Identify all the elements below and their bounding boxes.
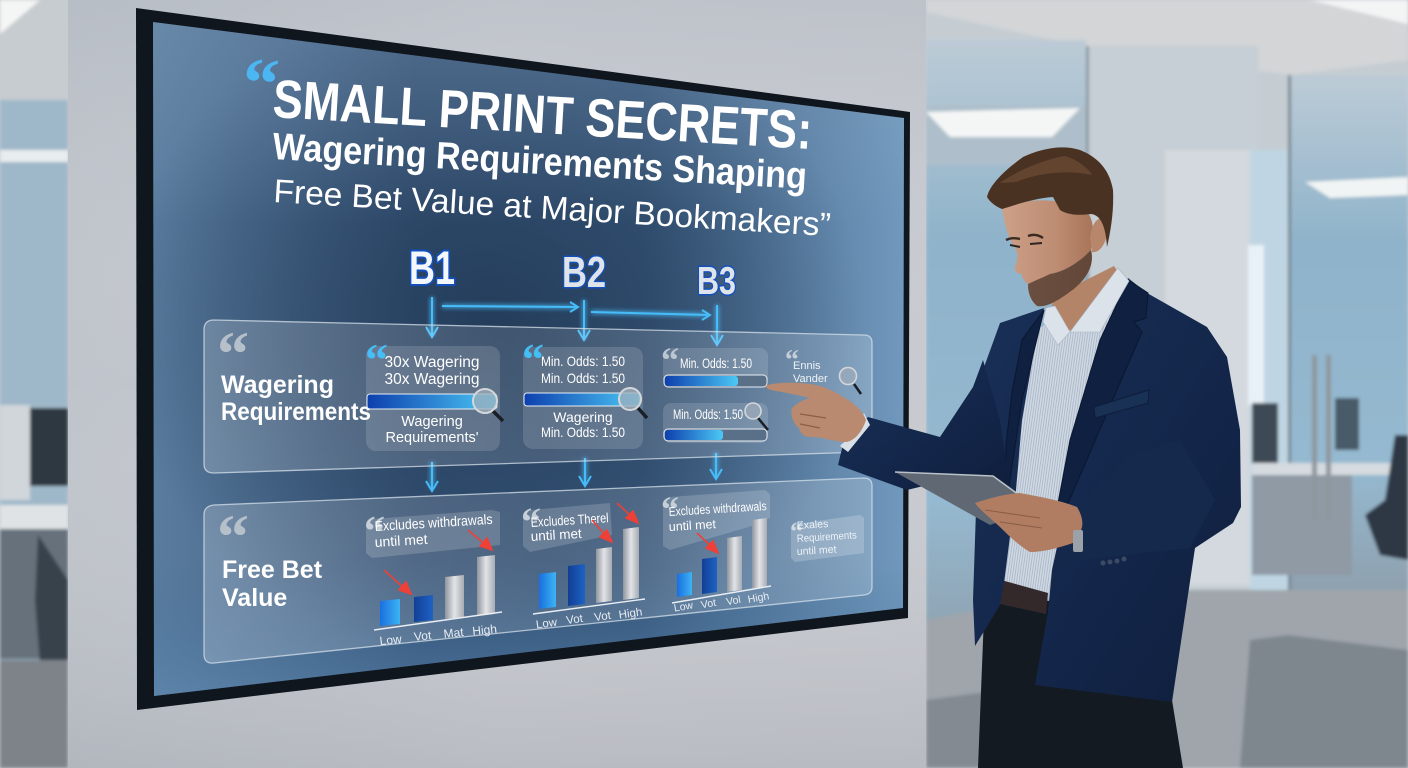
card: small requirements note: Exales [796, 518, 829, 532]
card: small requirements note: until met [796, 544, 837, 558]
card: B3 minimum odds upper [661, 340, 768, 387]
card: B2 minimum odds: Min. Odds: 1.50 [541, 353, 625, 369]
card: B2 minimum odds: “ [522, 335, 544, 384]
right sleeve cuff area [1077, 440, 1215, 560]
icon: magnifier [840, 368, 861, 394]
bar chart: Vol [725, 594, 742, 608]
card text: until met [668, 517, 717, 534]
jacket [973, 278, 1241, 702]
bar chart: Mat [443, 625, 465, 641]
bar chart: Vot [566, 613, 584, 627]
icon: magnifier [619, 388, 647, 418]
bar chart: High [747, 590, 770, 606]
title line 2: Wagering Requirements Shaping [271, 126, 808, 198]
red arrows [592, 503, 638, 542]
card text: Excludes Therel [530, 510, 609, 530]
card: small requirements note: Requirements [796, 529, 857, 545]
title line 3: Free Bet Value at Major Bookmakers” [273, 172, 832, 243]
shirt cuff [840, 413, 870, 452]
bar chart [374, 555, 502, 648]
card: B1 wagering: “ [365, 334, 388, 385]
bar chart: Vot [594, 610, 612, 624]
card: B1 wagering: Requirements' [385, 430, 479, 446]
tablet [895, 472, 1037, 525]
wristwatch [1073, 530, 1083, 552]
bar chart: Low [535, 617, 559, 631]
bar chart: Vot [413, 628, 433, 644]
icon: magnifier [473, 389, 503, 421]
card: B2 minimum odds: Wagering [553, 409, 613, 425]
panel quote mark: “ [217, 318, 249, 389]
shirt collar [1043, 268, 1129, 345]
chart group 3: “ [661, 489, 679, 529]
title [240, 42, 832, 243]
belt [1000, 580, 1048, 614]
panel heading: Free Bet [222, 556, 323, 584]
wall [68, 0, 926, 768]
hair [987, 147, 1113, 247]
card: B1 wagering [365, 334, 503, 451]
ear [1090, 218, 1107, 252]
card: small note: “ [785, 345, 799, 376]
panel: wagering requirements [204, 318, 872, 473]
head [987, 147, 1113, 306]
red arrow [697, 533, 718, 553]
card: B2 minimum odds: Min. Odds: 1.50 [541, 424, 625, 440]
bookmaker labels [409, 241, 736, 303]
card: small requirements note: “ [790, 517, 803, 546]
background: right office [926, 0, 1408, 768]
card: B1 wagering: 30x Wagering [384, 354, 480, 371]
beard [1028, 250, 1092, 306]
chart group 3 [661, 489, 771, 615]
card text: until met [374, 531, 428, 550]
card text [668, 499, 767, 534]
card text: Excludes withdrawals [374, 511, 493, 534]
wall-mounted screen [136, 8, 910, 710]
panel heading: Value [222, 584, 287, 612]
card: B1 wagering: 30x Wagering [384, 371, 480, 388]
neck [1050, 266, 1122, 332]
bar chart: High [472, 622, 498, 638]
lapel [1004, 280, 1148, 545]
title line 1: SMALL PRINT SECRETS: [271, 69, 814, 161]
label B2: B2 [562, 248, 606, 297]
pointing arm sleeve [838, 360, 1010, 490]
bar chart [533, 527, 645, 631]
background: left office [0, 0, 68, 768]
jacket pocket [1094, 390, 1149, 418]
bar chart: Low [379, 632, 403, 648]
card: B2 minimum odds [522, 335, 647, 449]
panel quote mark: “ [217, 501, 249, 572]
chart group 1 [364, 509, 502, 648]
sleeve buttons [1100, 556, 1126, 566]
bar chart: Vot [700, 597, 717, 611]
card text: until met [530, 526, 582, 544]
card: B3 minimum odds lower: Min. Odds: 1.50 [673, 407, 743, 422]
card: small note: Vander [793, 373, 828, 385]
label B3: B3 [697, 260, 736, 303]
card: B3 minimum odds lower [663, 403, 768, 443]
card: small note: Ennis [793, 360, 821, 372]
chart group 2 [521, 499, 645, 631]
trousers [978, 590, 1183, 768]
holding hand [975, 493, 1082, 552]
shirt [1002, 282, 1128, 600]
label B1: B1 [409, 241, 455, 294]
bar chart [672, 518, 771, 615]
person pointing at the screen [766, 147, 1241, 768]
panel heading: Requirements [221, 398, 371, 426]
card text: Excludes withdrawals [668, 499, 767, 519]
chart group 2: “ [521, 499, 541, 544]
card text [530, 510, 609, 544]
icon: magnifier [745, 403, 768, 430]
opening quote mark: “ [240, 42, 281, 124]
card: B1 wagering: Wagering [401, 414, 463, 430]
bar chart: High [618, 606, 643, 622]
card text [374, 511, 493, 550]
bar chart: Low [673, 599, 694, 615]
red arrows [384, 530, 492, 594]
card: B2 minimum odds: Min. Odds: 1.50 [541, 370, 625, 386]
pointing hand [766, 383, 866, 442]
panel heading: Wagering [221, 371, 334, 399]
flow arrows [426, 297, 723, 491]
card: B3 minimum odds upper: Min. Odds: 1.50 [680, 356, 752, 371]
chart group 1: “ [364, 509, 385, 555]
card: small requirements note [790, 515, 864, 562]
eye and brow [1006, 235, 1043, 240]
panel: free bet value [204, 478, 872, 663]
card: B3 minimum odds upper: “ [661, 340, 679, 380]
card: small note [785, 345, 861, 394]
